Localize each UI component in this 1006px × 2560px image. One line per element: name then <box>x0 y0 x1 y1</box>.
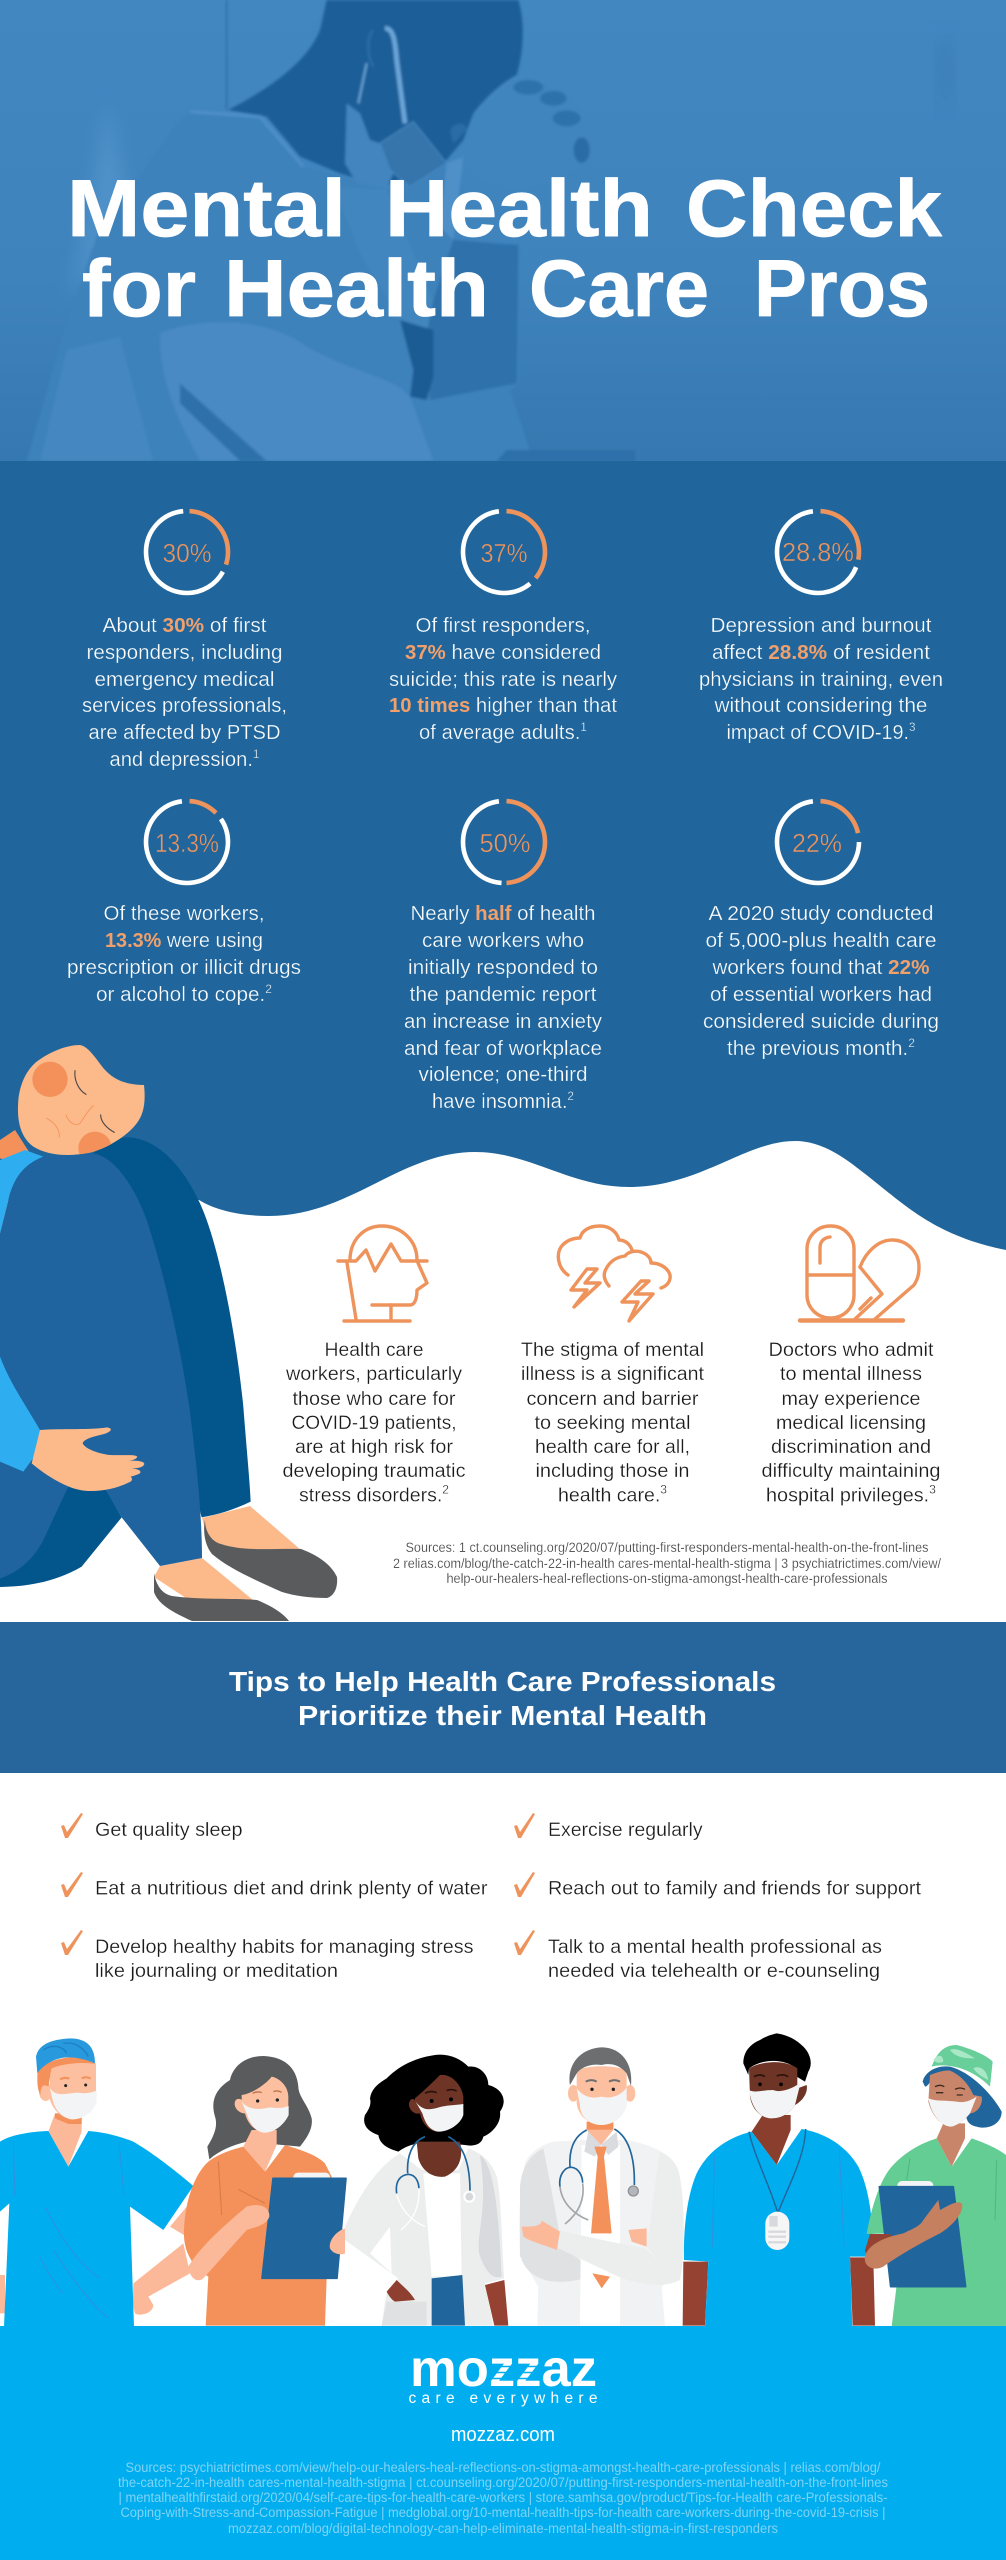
logo: mozzaz: care everywhere <box>408 2390 598 2407</box>
icon: pills <box>800 1226 919 1320</box>
tip: stress habits: Develop healthy habits for managing stress <box>95 1936 474 1958</box>
stat: 50 percent <box>404 801 603 1113</box>
stat: 13.3 percent: 13.3% were using <box>105 929 263 952</box>
stat: 13.3 percent: Of these workers, <box>104 902 264 925</box>
text: licensing discrimination: may experience <box>782 1388 920 1410</box>
stat: 28.8 percent: affect 28.8% of resident <box>712 641 930 664</box>
text: stigma barrier: health care. <box>558 1484 660 1506</box>
stat: 37 percent <box>389 511 618 744</box>
stat: 22 percent: considered suicide during <box>703 1010 939 1033</box>
text: trauma risk: Health care <box>324 1339 424 1361</box>
stat: 50 percent: an increase in anxiety <box>404 1010 603 1033</box>
text: trauma risk <box>282 1339 466 1506</box>
stat: 37 percent: 10 times higher than that <box>389 694 617 717</box>
panel: footer <box>0 2326 1006 2560</box>
tip: stress habits: like journaling or meditation <box>95 1960 338 1982</box>
stat: 50 percent: and fear of workplace <box>404 1037 602 1060</box>
tip: professional help <box>514 1930 882 1982</box>
title <box>67 164 943 334</box>
stat: 22 percent: of essential workers had <box>710 983 932 1006</box>
stat: 22 percent: workers found that 22% <box>711 956 930 979</box>
stat: 30 percent: and depression. <box>110 748 255 771</box>
tip: sleep <box>61 1813 243 1841</box>
stat: 50 percent: 2 <box>567 1089 574 1103</box>
text: stigma barrier: including those in <box>536 1460 690 1482</box>
stat: 22 percent <box>703 801 939 1060</box>
text: stigma barrier: 3 <box>660 1482 667 1496</box>
text: licensing discrimination: to mental illness <box>780 1363 922 1385</box>
sources: statistics: Sources: 1 ct.counseling.org/2020/07/putting-first-responders-mental-health-on-the-front-lines <box>406 1540 929 1555</box>
text: trauma risk: 2 <box>442 1482 449 1496</box>
stat: 37 percent: suicide; this rate is nearly <box>389 668 618 691</box>
tip: diet: Eat a nutritious diet and drink plenty of water <box>95 1878 488 1900</box>
sources: tips: the-catch-22-in-health cares-mental-health-stigma | ct.counseling.org/2020/07/putting-first-responders-mental-health-on-the-front-lines <box>118 2475 888 2490</box>
icon: storm clouds <box>558 1226 670 1321</box>
title: Care <box>529 244 709 334</box>
stat: 13.3 percent: or alcohol to cope. <box>96 983 264 1006</box>
stat: 30 percent: responders, including <box>86 641 282 664</box>
stat: 22 percent: 22% <box>792 828 842 858</box>
stat: 50 percent: 50% <box>480 828 530 858</box>
stat: 37 percent: 1 <box>580 720 587 734</box>
text: licensing discrimination: Doctors who admit <box>768 1339 934 1361</box>
text: stigma barrier <box>521 1339 705 1506</box>
sources: tips: Sources: psychiatrictimes.com/view/help-our-healers-heal-reflections-on-stigma-amongst-health-care-professionals | relias.com/blog/ <box>126 2460 881 2475</box>
stat: 37 percent: Of first responders, <box>416 614 590 637</box>
text: stigma barrier: health care for all, <box>535 1436 690 1458</box>
tip: professional help: Talk to a mental health professional as <box>548 1936 882 1958</box>
illustration: sitting health worker <box>0 1045 337 1621</box>
stat: 30 percent: emergency medical <box>94 668 274 691</box>
logo: mozzaz: mozzaz <box>410 2340 597 2398</box>
stat: 22 percent: the previous month. <box>727 1037 907 1060</box>
panel: tips heading band: Prioritize their Mental Health <box>298 1700 707 1731</box>
text: stigma barrier: illness is a significant <box>521 1363 705 1385</box>
illustration: nurse with lanyard <box>683 2033 875 2327</box>
text: licensing discrimination: medical licensing <box>776 1412 926 1434</box>
stat: 50 percent: the pandemic report <box>410 983 597 1006</box>
text: trauma risk: workers, particularly <box>285 1363 462 1385</box>
hero photo <box>0 0 1006 461</box>
tip: exercise: Exercise regularly <box>548 1819 703 1841</box>
title: Health <box>385 164 653 254</box>
stat: 50 percent: have insomnia. <box>432 1090 570 1113</box>
title: for <box>82 244 196 334</box>
stat: 50 percent: Nearly half of health <box>410 902 596 925</box>
stat: 37 percent: 37% have considered <box>405 641 601 664</box>
stat: 28.8 percent: Depression and burnout <box>710 614 932 637</box>
stat: 30 percent: 30% <box>162 538 212 568</box>
illustration: nurse in orange scrubs <box>184 2056 346 2326</box>
title: Mental <box>67 164 346 254</box>
text: trauma risk: developing traumatic <box>282 1460 466 1482</box>
stat: 30 percent: About 30% of first <box>102 614 267 637</box>
sources: tips: mozzaz.com/blog/digital-technology-can-help-eliminate-mental-health-stigma-in-first-responders <box>228 2521 778 2536</box>
text: stigma barrier: The stigma of mental <box>521 1339 704 1361</box>
title: Health <box>224 244 489 334</box>
stat: 22 percent: A 2020 study conducted <box>708 902 934 925</box>
stat: 22 percent: of 5,000-plus health care <box>706 929 936 952</box>
stat: 28.8 percent: 3 <box>909 720 916 734</box>
text: licensing discrimination: 3 <box>929 1482 936 1496</box>
sources: tips: Coping-with-Stress-and-Compassion-Fatigue | medglobal.org/10-mental-health-tips-for-health care-workers-during-the-covid-19-crisis | <box>120 2505 886 2520</box>
stat: 22 percent: 2 <box>908 1036 915 1050</box>
text: trauma risk: those who care for <box>292 1388 456 1410</box>
illustration: nurse in cyan scrubs <box>0 2038 193 2327</box>
stat: 50 percent: initially responded to <box>408 956 598 979</box>
stat: 28.8 percent: physicians in training, even <box>699 668 943 691</box>
panel: statistics background with wave <box>0 461 1006 1621</box>
text: stigma barrier: to seeking mental <box>534 1412 690 1434</box>
website: mozzaz.com <box>451 2424 555 2446</box>
stat: 30 percent: are affected by PTSD <box>88 721 280 744</box>
text: trauma risk: COVID-19 patients, <box>292 1412 456 1434</box>
stat: 13.3 percent: 2 <box>265 982 272 996</box>
stat: 13.3 percent: prescription or illicit drugs <box>67 956 301 979</box>
stat: 30 percent: 1 <box>253 747 260 761</box>
text: licensing discrimination <box>762 1339 940 1506</box>
text: licensing discrimination: difficulty maintaining <box>762 1460 940 1482</box>
stat: 13.3 percent <box>67 801 301 1006</box>
tip: exercise <box>514 1813 703 1841</box>
panel: tips heading band: Tips to Help Health Care Professionals <box>229 1666 776 1697</box>
sources: statistics: help-our-healers-heal-reflections-on-stigma-amongst-health-care-professionals <box>446 1571 888 1586</box>
icon: head with crack <box>338 1226 427 1321</box>
sources: statistics: 2 relias.com/blog/the-catch-22-in-health cares-mental-health-stigma | 3 psychiatrictimes.com/view/ <box>393 1556 941 1571</box>
illustration: nurse in green scrubs <box>865 2045 1006 2327</box>
tip: stress habits <box>61 1930 474 1982</box>
title: Check <box>686 164 943 254</box>
stat: 13.3 percent: 13.3% <box>155 828 219 858</box>
sources: tips: | mentalhealthfirstaid.org/2020/04/self-care-tips-for-health-care-workers | store.samhsa.gov/product/Tips-for-Health care-Professionals- <box>118 2490 888 2505</box>
panel: tips heading band <box>0 1622 1006 1773</box>
text: licensing discrimination: discrimination and <box>771 1436 931 1458</box>
illustration: doctor with tie <box>519 2047 684 2326</box>
stat: 50 percent: care workers who <box>422 929 584 952</box>
stat: 50 percent: violence; one-third <box>418 1063 588 1086</box>
tip: sleep: Get quality sleep <box>95 1819 243 1841</box>
stat: 37 percent: of average adults. <box>419 721 582 744</box>
stat: 30 percent <box>82 511 287 771</box>
stat: 28.8 percent: without considering the <box>713 694 928 717</box>
title: Pros <box>754 244 930 334</box>
text: trauma risk: are at high risk for <box>295 1436 454 1458</box>
sources: tips <box>118 2460 888 2536</box>
sources: statistics <box>393 1540 941 1586</box>
stat: 30 percent: services professionals, <box>82 694 287 717</box>
tip: professional help: needed via telehealth or e-counseling <box>548 1960 880 1982</box>
tip: family support: Reach out to family and friends for support <box>548 1878 922 1900</box>
text: trauma risk: stress disorders. <box>299 1484 442 1506</box>
illustration: doctor with curly hair <box>345 2055 508 2326</box>
stat: 28.8 percent: 28.8% <box>782 537 854 567</box>
stat: 28.8 percent <box>699 511 943 744</box>
stat: 37 percent: 37% <box>480 538 528 568</box>
text: stigma barrier: concern and barrier <box>526 1388 699 1410</box>
text: licensing discrimination: hospital privileges. <box>766 1484 926 1506</box>
stat: 28.8 percent: impact of COVID-19. <box>726 721 916 744</box>
